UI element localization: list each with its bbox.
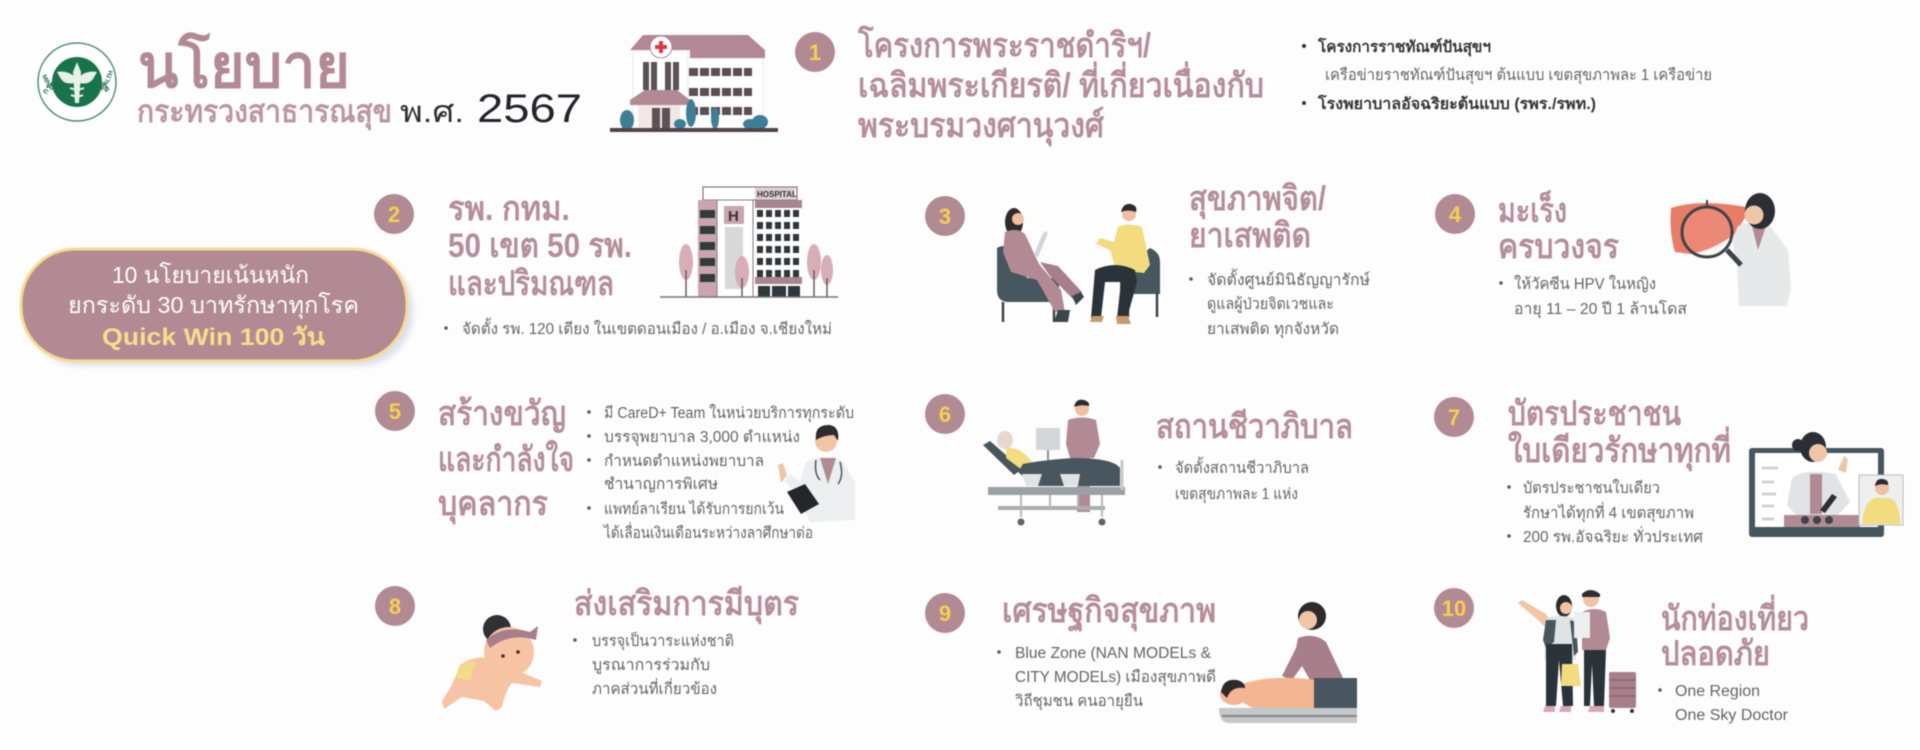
heading 4: มะเร็ง [1498, 189, 1567, 230]
icon: therapist and patient [997, 204, 1160, 324]
subtitle [137, 87, 582, 131]
callout: 10 policies quick win: Quick Win 100 วัน [102, 324, 326, 351]
heading 9: เศรษฐกิจสุขภาพ [1002, 592, 1216, 633]
bullets 1: เครือข่ายราชทัณฑ์ปันสุขฯ ต้นแบบ เขตสุขภาพละ 1 เครือข่าย [1325, 66, 1712, 85]
bullets 9: วิถีชุมชน คนอายุยืน [1015, 692, 1143, 711]
callout: 10 policies quick win: ยกระดับ 30 บาทรักษาทุกโรค [68, 292, 359, 319]
heading 7: ใบเดียวรักษาทุกที่ [1508, 426, 1731, 472]
heading 1: เฉลิมพระเกียรติ/ ที่เกี่ยวเนื่องกับ [858, 61, 1264, 105]
bullets 3: ดูแลผู้ป่วยจิตเวชและ [1207, 296, 1334, 314]
bullets 4 [1499, 275, 1688, 319]
number badge 3: 3 [939, 204, 951, 229]
icon: city hospital tower: HOSPITAL [757, 190, 797, 199]
heading 3 [1189, 180, 1326, 255]
main title: นโยบาย [138, 31, 350, 100]
panel 2: Bangkok hospitals [374, 187, 838, 338]
number badge 10 [1434, 588, 1474, 628]
bullets 1: โครงการราชทัณฑ์ปันสุขฯ [1317, 37, 1491, 57]
heading 4 [1498, 189, 1620, 266]
panel 10: safe tourism [1434, 588, 1809, 724]
number badge 7: 7 [1448, 405, 1460, 430]
bullets 3 [1189, 268, 1370, 339]
panel 1: royal projects [610, 25, 1712, 147]
bullets 5: กำหนดตำแหน่งพยาบาล [604, 453, 764, 470]
panel 9: health economy [925, 592, 1357, 723]
bullets 7: 200 รพ.อัจฉริยะ ทั่วประเทศ [1523, 526, 1703, 546]
bullets 9: CITY MODELs) เมืองสุขภาพดี [1015, 668, 1216, 687]
heading 3: สุขภาพจิต/ [1189, 180, 1326, 220]
header: logo and title [36, 31, 582, 131]
heading 2 [448, 190, 632, 303]
number badge 5 [375, 391, 415, 431]
panel 6: palliative care [925, 394, 1353, 526]
heading 7: บัตรประชาชน [1508, 395, 1681, 433]
icon: patient bed with nurse [983, 400, 1125, 526]
number badge 4 [1435, 194, 1475, 234]
bullets 5: ชำนาญการพิเศษ [604, 476, 718, 493]
icon: crawling baby [442, 615, 542, 711]
number badge 3 [925, 196, 965, 236]
bullets 3: ยาเสพติด ทุกจังหวัด [1207, 321, 1339, 339]
icon: ministry of public health seal: กระทรวงสาธารณสุข [42, 72, 110, 95]
icon: tourists with luggage [1518, 590, 1636, 713]
heading 5: และกำลังใจ [438, 439, 574, 479]
number badge 6 [925, 394, 965, 434]
bullets 10 [1658, 683, 1788, 724]
panel 5: staff morale [375, 391, 855, 542]
icon: city hospital tower: H [728, 208, 739, 225]
bullets 4: ให้วัคซีน HPV ในหญิง [1514, 275, 1656, 293]
bullets 1: โรงพยาบาลอัจฉริยะต้นแบบ (รพร./รพท.) [1317, 94, 1596, 113]
number badge 8 [375, 586, 415, 626]
icon: city hospital tower [660, 187, 838, 297]
bullets 1 [1302, 37, 1712, 113]
heading 3: ยาเสพติด [1189, 217, 1311, 255]
bullets 7 [1507, 479, 1703, 546]
bullets 7: รักษาได้ทุกที่ 4 เขตสุขภาพ [1523, 502, 1694, 523]
heading 1 [857, 25, 1264, 147]
bullets 8: บรรจุเป็นวาระแห่งชาติ [592, 631, 734, 651]
panel 4: cancer [1435, 189, 1791, 319]
heading 7 [1508, 395, 1731, 472]
bullets 6: เขตสุขภาพละ 1 แห่ง [1175, 486, 1298, 504]
heading 8: ส่งเสริมการมีบุตร [574, 585, 800, 625]
icon: telemedicine laptop [1749, 432, 1903, 537]
heading 4: ครบวงจร [1498, 228, 1620, 266]
number badge 2: 2 [388, 202, 400, 227]
heading 6: สถานชีวาภิบาล [1156, 408, 1353, 446]
heading 10: ปลอดภัย [1661, 635, 1770, 673]
panel 8: promote childbirth [375, 585, 800, 711]
subtitle: 2567 [477, 87, 582, 131]
heading 2: และปริมณฑล [448, 265, 614, 303]
bullets 8: บูรณาการร่วมกับ [592, 657, 710, 675]
bullets 5: ได้เลื่อนเงินเดือนระหว่างลาศึกษาต่อ [602, 522, 813, 542]
number badge 2 [374, 194, 414, 234]
number badge 9: 9 [939, 601, 951, 626]
icon: ministry of public health seal: MINISTRY OF PUBLIC HEALTH [42, 70, 114, 100]
number badge 5: 5 [389, 399, 401, 424]
heading 5 [438, 395, 574, 525]
icon: hospital building [610, 35, 778, 132]
heading 1: โครงการพระราชดำริฯ/ [857, 25, 1151, 65]
heading 1: พระบรมวงศานุวงศ์ [858, 106, 1104, 147]
number badge 4: 4 [1449, 202, 1462, 227]
bullets 4: อายุ 11 – 20 ปี 1 ล้านโดส [1514, 300, 1688, 319]
icon: ministry of public health seal [36, 42, 118, 122]
number badge 1 [795, 32, 835, 72]
heading 2: รพ. กทม. [448, 190, 570, 228]
callout: 10 policies quick win [21, 249, 413, 366]
subtitle: พ.ศ. [400, 96, 464, 129]
number badge 10: 10 [1442, 596, 1466, 621]
panel 7: national ID card [1434, 395, 1903, 546]
bullets 8 [573, 631, 734, 698]
heading 10 [1661, 594, 1809, 673]
subtitle: กระทรวงสาธารณสุข [137, 94, 392, 131]
icon: massage therapist and client [1219, 602, 1357, 723]
bullets 9: Blue Zone (NAN MODELs & [1015, 645, 1212, 662]
number badge 9 [925, 593, 965, 633]
number badge 7 [1434, 397, 1474, 437]
icon: doctor with liver and magnifier [1670, 193, 1791, 306]
bullets 8: ภาคส่วนที่เกี่ยวข้อง [592, 678, 717, 698]
bullets 10: One Sky Doctor [1675, 707, 1788, 724]
panel 3: mental health [925, 180, 1370, 339]
bullets 5 [587, 404, 854, 542]
heading 5: บุคลากร [438, 485, 549, 525]
bullets 5: แพทย์ลาเรียน ได้รับการยกเว้น [604, 500, 784, 518]
callout: 10 policies quick win: 10 นโยบายเน้นหนัก [112, 262, 309, 288]
heading 5: สร้างขวัญ [438, 395, 566, 434]
icon: doctor with tablet [778, 425, 855, 522]
number badge 6: 6 [939, 402, 951, 427]
bullets 6 [1158, 456, 1309, 504]
bullets 5: มี CareD+ Team ในหน่วยบริการทุกระดับ [604, 404, 854, 423]
heading 2: 50 เขต 50 รพ. [448, 227, 632, 265]
bullets 5: บรรจุพยาบาล 3,000 ตำแหน่ง [604, 429, 800, 447]
bullets 3: จัดตั้งศูนย์มินิธัญญารักษ์ [1207, 268, 1370, 290]
bullet 2: จัดตั้ง รพ. 120 เตียง ในเขตดอนเมือง / อ.เมือง จ.เชียงใหม่ [462, 317, 832, 338]
bullets 9 [997, 645, 1216, 711]
bullets 7: บัตรประชาชนใบเดียว [1523, 479, 1660, 497]
heading 10: นักท่องเที่ยว [1661, 594, 1809, 638]
number badge 1: 1 [809, 40, 821, 65]
bullets 10: One Region [1675, 683, 1760, 700]
bullets 6: จัดตั้งสถานชีวาภิบาล [1175, 456, 1309, 477]
number badge 8: 8 [389, 594, 401, 619]
